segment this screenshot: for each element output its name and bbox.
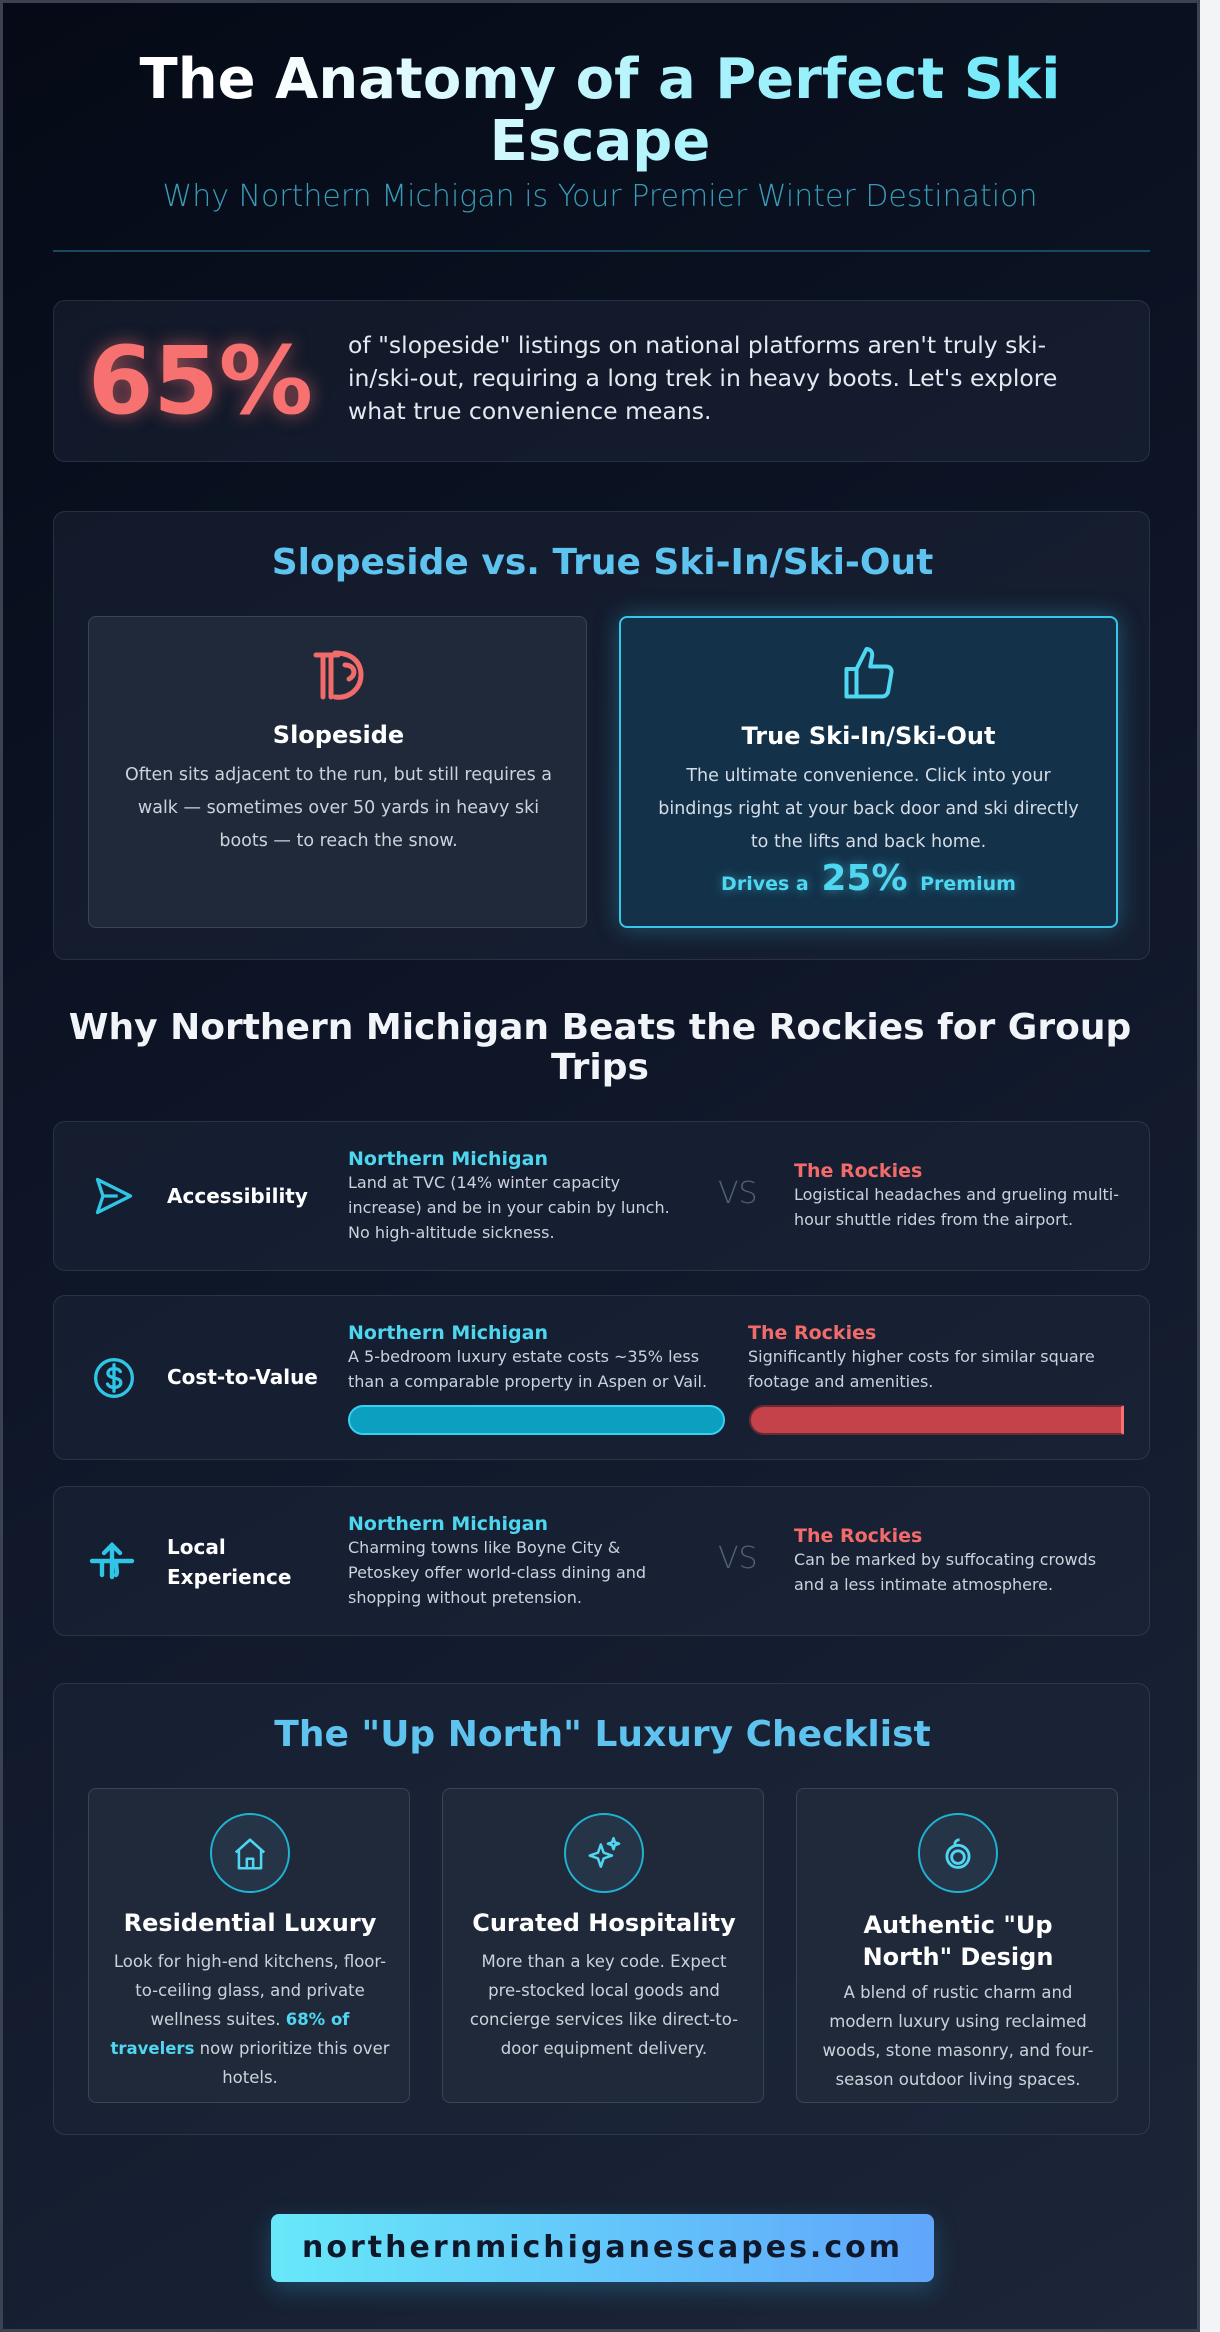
row: cost-to-value [53,1295,1150,1460]
heading: Slopeside vs. True Ski-In/Ski-Out [272,542,933,583]
Rockies column [748,1322,1095,1391]
stat panel: 65% [53,300,1150,462]
Rockies column: Significantly higher costs for similar square footage and amenities. [748,1347,1095,1391]
icon: paper plane [96,1178,132,1214]
icon: thumbs up [844,647,894,698]
NM column: Charming towns like Boyne City & Petoskey offer world-class dining and shopping without pretension. [348,1538,646,1607]
card title: Slopeside [273,721,404,749]
bar: NM [348,1405,725,1435]
Rockies column: The Rockies [794,1160,922,1182]
card text: Often sits adjacent to the run, but still requires a walk — sometimes over 50 yards in heavy ski boots — to reach the snow. [125,765,552,851]
heading: why northern michigan: Why Northern Michigan Beats the Rockies for Group [69,1007,1131,1048]
NM column: A 5-bedroom luxury estate costs ~35% less than a comparable property in Aspen or Vail. [348,1347,707,1391]
Rockies column [794,1525,1096,1594]
text: Look for high-end kitchens, floor-to-ceiling glass, and private wellness suites. 68% of travelers now prioritize this over hotels. [110,1952,390,2087]
footer url button: northernmichiganescapes.com [302,2230,903,2265]
text: More than a key code. Expect pre-stocked local goods and concierge services like direct-to-door equipment delivery. [470,1952,738,2058]
label: Experience [167,1565,291,1589]
card: slopeside [88,616,587,928]
icon: dollar [94,1358,134,1398]
icon: fire [918,1813,998,1893]
NM column: Land at TVC (14% winter capacity increase) and be in your cabin by lunch. No high-altitude sickness. [348,1173,670,1242]
title: Authentic "Up [863,1911,1053,1939]
card: authentic design [796,1788,1118,2103]
card: curated hospitality [442,1788,764,2103]
panel: slopeside vs ski-in [53,511,1150,960]
text: A blend of rustic charm and modern luxury using reclaimed woods, stone masonry, and four-season outdoor living spaces. [823,1983,1093,2089]
card text [658,766,1079,852]
Rockies column: The Rockies [748,1322,876,1344]
NM column: Northern Michigan [348,1513,548,1535]
heading: why northern michigan: Trips [551,1047,649,1088]
label: Cost-to-Value [167,1365,318,1389]
NM column [348,1322,707,1391]
heading: why northern michigan [69,1007,1131,1088]
label: Accessibility [167,1184,308,1208]
title [3,49,1197,173]
Rockies column: Logistical headaches and grueling multi-hour shuttle rides from the airport. [794,1185,1119,1229]
Rockies column: The Rockies [794,1525,922,1547]
panel: luxury checklist [53,1683,1150,2135]
card text: to the lifts and back home. [751,832,986,852]
stat text: of "slopeside" listings on national platforms aren't truly ski-in/ski-out, requiring a long trek in heavy boots. Let's explore what true convenience means. [348,331,1057,425]
footer url button [271,2214,934,2282]
stat number: 65% [88,327,313,436]
Rockies column [794,1160,1119,1229]
vs: VS [718,1176,758,1211]
icon: slopeside [314,650,364,700]
label [167,1535,291,1589]
card: residential luxury [88,1788,410,2103]
card text: The ultimate convenience. Click into your [686,766,1051,786]
NM column: Northern Michigan [348,1148,548,1170]
card text: bindings right at your back door and ski directly [658,799,1079,819]
row: local experience [53,1486,1150,1636]
NM column: Northern Michigan [348,1322,548,1344]
premium callout: Drives a 25% Premium [721,858,1016,899]
icon: sparkles [564,1813,644,1893]
card: true ski-in [619,616,1118,928]
title: Curated Hospitality [472,1909,736,1937]
title: Residential Luxury [124,1909,376,1937]
subtitle: Why Northern Michigan is Your Premier Winter Destination [163,179,1037,214]
title: North" Design [863,1943,1053,1971]
title: The Anatomy of a Perfect Ski [140,47,1060,112]
heading: The "Up North" Luxury Checklist [274,1714,931,1755]
Rockies column: Can be marked by suffocating crowds and a less intimate atmosphere. [794,1550,1096,1594]
row: accessibility [53,1121,1150,1271]
icon: local [90,1542,134,1580]
card title: True Ski-In/Ski-Out [742,722,995,750]
title: Escape [490,109,710,174]
vs: VS [718,1541,758,1576]
icon: house [210,1813,290,1893]
label: Local [167,1535,226,1559]
title [863,1911,1053,1971]
bar: Rockies [749,1405,1124,1435]
